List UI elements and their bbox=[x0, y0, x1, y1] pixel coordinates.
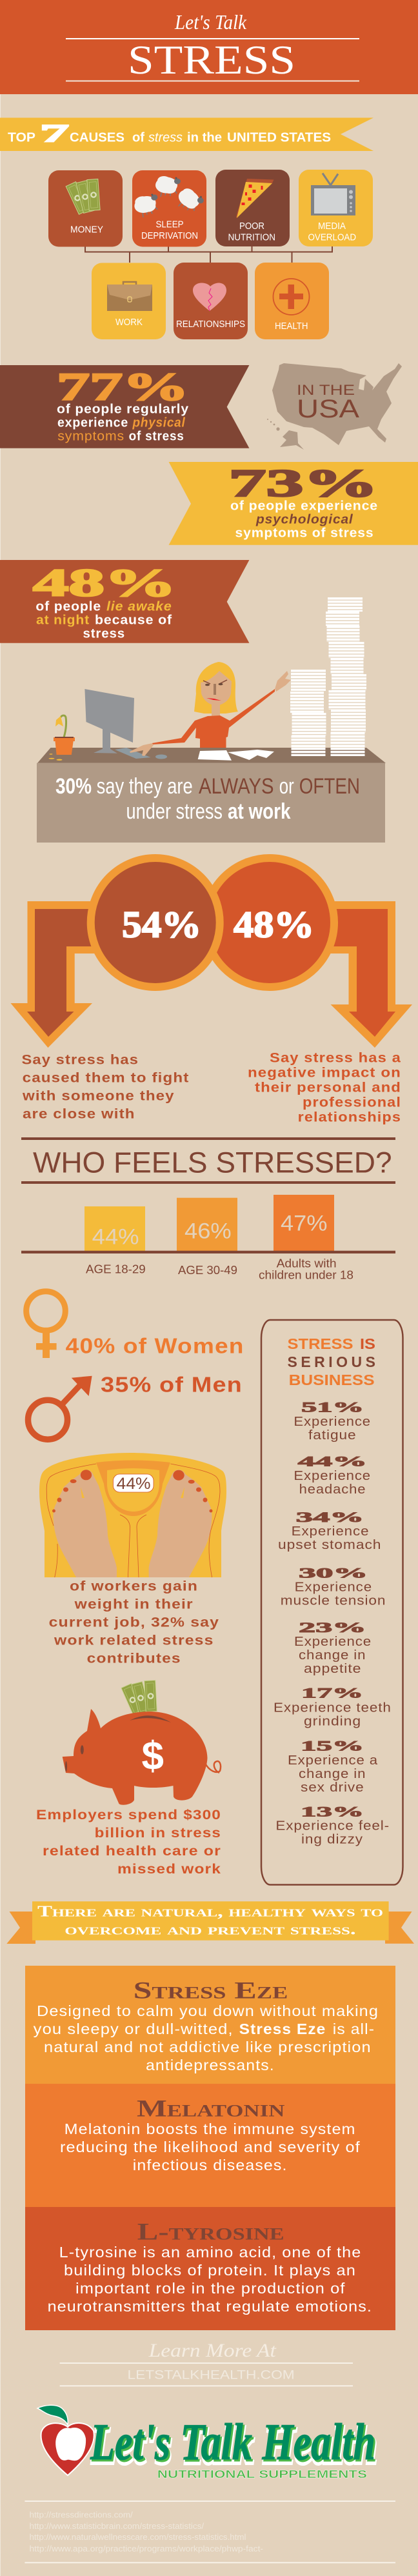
ribbon: 73% psychological symptoms: symptoms of stress bbox=[235, 526, 374, 541]
bar: age 18-29: 44% bbox=[92, 1224, 139, 1249]
ribbon: 48% lie awake: because of bbox=[95, 614, 172, 628]
stat: appetite: 23% bbox=[299, 1619, 366, 1635]
keyboard and mouse bbox=[115, 748, 167, 759]
text: workers gain weight: current job, 32% say bbox=[49, 1614, 219, 1630]
ribbon: 48% lie awake: lie awake bbox=[106, 600, 172, 614]
text: employers spend bbox=[36, 1807, 221, 1877]
stat: muscle tension: muscle tension bbox=[281, 1594, 386, 1608]
woman bbox=[130, 662, 291, 756]
stat: headache: 44% bbox=[298, 1453, 367, 1470]
banner: top 7 causes: of bbox=[132, 130, 144, 145]
stat: upset stomach: Experience bbox=[292, 1524, 369, 1539]
panel: Melatonin: Melatonin boosts the immune system bbox=[65, 2121, 356, 2137]
stat: sex drive: 15% bbox=[301, 1738, 364, 1754]
stat: dizzy: 13% bbox=[301, 1804, 364, 1820]
stat: fatigue: 51% bbox=[301, 1399, 364, 1415]
ribbon: 48% lie awake: 48% bbox=[33, 561, 176, 604]
bar: adults with children: children under 18 bbox=[259, 1268, 353, 1281]
stat: appetite: appetite bbox=[304, 1662, 361, 1676]
banner: natural healthy ways: overcome and prevent stress. bbox=[65, 1922, 356, 1939]
stat: fatigue: Experience bbox=[294, 1415, 371, 1429]
bar: adults with children: 47% bbox=[281, 1211, 328, 1235]
desk caption: under stress bbox=[126, 799, 223, 824]
panel: sleep deprivation: DEPRIVATION bbox=[141, 230, 198, 241]
left arrow bbox=[10, 901, 97, 1048]
stat: sex drive: change in bbox=[299, 1767, 366, 1781]
panel: sleep deprivation: SLEEP bbox=[156, 219, 183, 230]
stat: dizzy: ing dizzy bbox=[301, 1833, 363, 1847]
text: employers spend: missed work bbox=[117, 1861, 221, 1877]
bar: adults with children bbox=[259, 1195, 353, 1281]
panel: Stress Eze: is all- bbox=[333, 2021, 375, 2037]
ribbon: 48% lie awake: stress bbox=[83, 626, 125, 641]
panel: money bbox=[48, 170, 123, 246]
panel: health: HEALTH bbox=[275, 321, 308, 332]
loose papers bbox=[198, 750, 274, 761]
ribbon: 77% physical symptoms: of people regularly bbox=[57, 403, 189, 417]
stat: headache bbox=[294, 1453, 371, 1497]
script heading: Let's Talk: Let's Talk bbox=[174, 10, 247, 34]
panel: money: MONEY bbox=[70, 225, 103, 235]
ribbon: 77% physical symptoms bbox=[0, 365, 249, 448]
ribbon: 73% psychological symptoms: of people experience bbox=[230, 499, 378, 514]
stat: fatigue bbox=[294, 1399, 371, 1443]
banknotes bbox=[121, 1681, 157, 1716]
bar: adults with children: Adults with bbox=[277, 1257, 337, 1270]
banner: top 7 causes: TOP bbox=[8, 130, 35, 145]
bar chart bbox=[21, 1195, 395, 1281]
stat: dizzy: Experience feel- bbox=[275, 1819, 390, 1833]
call to action: learn more: Learn More At bbox=[148, 2340, 277, 2361]
ribbon: 73% psychological symptoms: psychological bbox=[255, 513, 353, 527]
desk caption: OFTEN bbox=[299, 774, 360, 799]
map: in the USA: USA bbox=[297, 395, 359, 423]
computer monitor bbox=[85, 689, 134, 754]
panel: Stress Eze bbox=[25, 1966, 395, 2084]
sources: http://stressdirections.com/ bbox=[30, 2510, 133, 2520]
logo: Let's Talk Health: NUTRITIONAL SUPPLEMENTS bbox=[157, 2468, 367, 2481]
stat: upset stomach: upset stomach bbox=[278, 1538, 381, 1552]
stat: women: 40% of Women bbox=[66, 1334, 244, 1358]
ribbon: 77% physical symptoms: of stress bbox=[129, 430, 184, 444]
repeat front stack feet over desk top bbox=[308, 748, 348, 756]
desk caption: 30% bbox=[55, 774, 92, 799]
ribbon: 73% psychological symptoms bbox=[169, 462, 418, 545]
circle: 48% bbox=[205, 858, 334, 987]
icon: banknotes bbox=[66, 179, 100, 214]
bar: age 30-49: AGE 30-49 bbox=[178, 1264, 237, 1277]
stat: muscle tension bbox=[281, 1565, 386, 1608]
ribbon: 77% physical symptoms: symptoms bbox=[57, 430, 124, 444]
icon: broken heart bbox=[193, 283, 226, 311]
text: employers spend: billion in stress bbox=[95, 1825, 221, 1841]
panel: media overload bbox=[299, 170, 373, 246]
sources bbox=[25, 2501, 395, 2563]
circle: 48%: 48% bbox=[234, 904, 314, 946]
logo: Let's Talk Health bbox=[37, 2405, 377, 2481]
banner: top 7 causes: 7 bbox=[40, 120, 69, 148]
text: 54% description: Say stress has bbox=[22, 1052, 139, 1067]
stat: teeth grinding bbox=[274, 1685, 392, 1728]
connector lines between causes bbox=[85, 246, 332, 263]
stat: sex drive: sex drive bbox=[301, 1781, 364, 1795]
banner: natural healthy ways: There are natural, healthy ways to bbox=[37, 1904, 383, 1921]
text: 48% description: relationships bbox=[298, 1110, 401, 1125]
text: employers spend: related health care or bbox=[43, 1843, 221, 1859]
panel: Melatonin: reducing the likelihood and severity of bbox=[60, 2139, 361, 2155]
sources: http://www.statisticbrain.com/stress-statistics/ bbox=[30, 2521, 204, 2531]
desk caption: say they are bbox=[97, 774, 193, 799]
ribbon: 48% lie awake bbox=[0, 560, 249, 643]
icon: briefcase bbox=[107, 282, 152, 311]
bar: age 30-49: 46% bbox=[184, 1219, 232, 1243]
text: 48% description: negative impact on bbox=[248, 1065, 401, 1081]
title: STRESS: STRESS bbox=[128, 37, 295, 83]
panel: L-tyrosine bbox=[25, 2207, 395, 2330]
panel: work bbox=[92, 263, 166, 339]
icon: apple bbox=[37, 2405, 94, 2475]
desk caption bbox=[55, 774, 360, 824]
banner: top 7 causes bbox=[0, 117, 373, 151]
text: 54% description: caused them to fight bbox=[23, 1070, 189, 1086]
map: in the USA bbox=[267, 363, 402, 450]
circle: 54%: 54% bbox=[122, 904, 201, 946]
banner: top 7 causes: stress bbox=[148, 130, 183, 145]
icon: bathroom scale with feet: 44% bbox=[117, 1475, 151, 1493]
bar: age 30-49 bbox=[177, 1198, 237, 1277]
panel: poor nutrition: POOR bbox=[239, 221, 264, 232]
map: in the USA: IN THE bbox=[297, 382, 355, 398]
text: 48% description: Say stress has a bbox=[270, 1050, 401, 1066]
heading: who feels stressed bbox=[21, 1137, 395, 1184]
icon: male symbol bbox=[28, 1376, 92, 1439]
stat: headache: Experience bbox=[294, 1469, 371, 1483]
text: workers gain weight: work related stress bbox=[54, 1632, 214, 1648]
banner: top 7 causes: CAUSES bbox=[70, 130, 124, 145]
desk caption: or bbox=[279, 774, 294, 799]
panel: Stress Eze: antidepressants. bbox=[146, 2057, 275, 2073]
call to action: learn more bbox=[60, 2340, 353, 2386]
panel: Stress Eze: you sleepy or dull-witted, bbox=[34, 2021, 234, 2037]
panel heading: STRESS bbox=[288, 1335, 353, 1352]
stat: muscle tension: 30% bbox=[299, 1565, 368, 1581]
text: 48% description: professional bbox=[303, 1095, 401, 1110]
circle: 54% bbox=[91, 858, 220, 987]
text: 48% description: their personal and bbox=[255, 1080, 401, 1095]
text: 54% description: with someone they bbox=[22, 1088, 175, 1104]
stat: appetite bbox=[294, 1619, 372, 1676]
panel: relationships: RELATIONSHIPS bbox=[176, 319, 245, 330]
stat: appetite: change in bbox=[299, 1648, 366, 1662]
header panel bbox=[0, 0, 418, 94]
stat: sex drive bbox=[288, 1738, 378, 1795]
icon: piggy bank: $ bbox=[142, 1734, 164, 1779]
panel: poor nutrition: NUTRITION bbox=[228, 232, 275, 243]
text: workers gain weight: contributes bbox=[87, 1650, 181, 1666]
panel: health bbox=[255, 263, 329, 339]
desk caption: ALWAYS bbox=[199, 774, 274, 799]
right arrow bbox=[323, 901, 412, 1048]
stat: muscle tension: Experience bbox=[295, 1581, 372, 1595]
panel: L-tyrosine: important role in the production of bbox=[75, 2280, 346, 2297]
ribbon: 77% physical symptoms: physical bbox=[132, 416, 186, 430]
ribbon: 77% physical symptoms: experience bbox=[57, 416, 128, 430]
bar: age 18-29 bbox=[85, 1206, 146, 1275]
text: workers gain weight: weight in their bbox=[74, 1596, 194, 1612]
stat: upset stomach: 34% bbox=[296, 1509, 364, 1525]
panel: Stress Eze: Stress Eze bbox=[134, 1978, 288, 2004]
panel: Stress Eze: Stress Eze bbox=[239, 2021, 326, 2037]
panel: Melatonin: infectious diseases. bbox=[133, 2157, 288, 2173]
icon: pizza slice bbox=[236, 179, 274, 218]
heading: who feels stressed: WHO FEELS STRESSED? bbox=[33, 1146, 392, 1179]
stat: fatigue: fatigue bbox=[308, 1428, 357, 1443]
banner: top 7 causes: in the bbox=[187, 130, 222, 145]
panel: relationships bbox=[174, 263, 248, 339]
sources: http://www.apa.org/practice/programs/workplace/phwp-fact- bbox=[30, 2544, 263, 2553]
paper stacks bbox=[307, 597, 349, 756]
bar: age 18-29: AGE 18-29 bbox=[86, 1263, 146, 1275]
panel: Melatonin bbox=[25, 2084, 395, 2207]
panel: L-tyrosine: neurotransmitters that regulate emotions. bbox=[48, 2298, 372, 2315]
panel: Melatonin: Melatonin bbox=[137, 2096, 285, 2122]
desk caption: at work bbox=[228, 799, 291, 824]
icon: sheep bbox=[132, 176, 206, 219]
panel: work: WORK bbox=[115, 317, 143, 328]
panel: stress is serious business bbox=[261, 1320, 403, 1885]
panel: poor nutrition bbox=[215, 170, 290, 246]
panel heading: SERIOUS bbox=[288, 1353, 375, 1370]
panel: Stress Eze: natural and not addictive like prescription bbox=[44, 2039, 372, 2055]
desk bbox=[37, 748, 386, 763]
stat: teeth grinding: grinding bbox=[304, 1714, 361, 1728]
ribbon: 73% psychological symptoms: 73% bbox=[229, 462, 378, 504]
stat: headache: headache bbox=[299, 1483, 366, 1497]
text: 54% description bbox=[22, 1052, 189, 1122]
stat: teeth grinding: Experience teeth bbox=[274, 1701, 392, 1715]
stat: upset stomach bbox=[278, 1509, 381, 1552]
panel heading bbox=[288, 1335, 375, 1388]
icon: medical cross bbox=[274, 279, 310, 315]
stat: appetite: Experience bbox=[294, 1635, 372, 1649]
stat: dizzy bbox=[275, 1804, 390, 1847]
icon: television bbox=[311, 173, 355, 215]
text: workers gain weight: of workers gain bbox=[70, 1578, 198, 1593]
panel: Stress Eze: Designed to calm you down without making bbox=[37, 2002, 379, 2019]
call to action: learn more: LETSTALKHEALTH.COM bbox=[128, 2369, 295, 2382]
ribbon: 77% physical symptoms: 77% bbox=[57, 365, 189, 408]
stat: men: 35% of Men bbox=[101, 1372, 243, 1396]
icon: bathroom scale with feet bbox=[39, 1453, 226, 1577]
stat: sex drive: Experience a bbox=[288, 1753, 378, 1768]
icon: female symbol bbox=[26, 1292, 65, 1358]
text: employers spend: Employers spend $300 bbox=[36, 1807, 221, 1822]
text: workers gain weight bbox=[49, 1578, 219, 1666]
panel: media overload: MEDIA bbox=[318, 221, 346, 232]
banner: top 7 causes: UNITED STATES bbox=[227, 130, 331, 145]
text: 54% description: are close with bbox=[23, 1106, 135, 1122]
sources: http://www.naturalwellnesscare.com/stress-statistics.html bbox=[30, 2532, 246, 2542]
panel: L-tyrosine: building blocks of protein. It plays an bbox=[64, 2262, 356, 2279]
text: 48% description bbox=[248, 1050, 401, 1125]
panel: L-tyrosine: L-tyrosine is an amino acid, one of the bbox=[59, 2244, 361, 2261]
icon: piggy bank bbox=[63, 1681, 221, 1805]
panel: sleep deprivation bbox=[132, 170, 206, 246]
illustration: stressed worker at desk bbox=[37, 597, 386, 843]
panel: media overload: OVERLOAD bbox=[308, 232, 356, 243]
ribbon: 48% lie awake: at night bbox=[36, 614, 90, 628]
banner: natural healthy ways bbox=[6, 1901, 414, 1944]
panel heading: BUSINESS bbox=[289, 1372, 375, 1388]
stat: teeth grinding: 17% bbox=[301, 1685, 363, 1701]
panel heading: IS bbox=[360, 1335, 375, 1352]
wilted plant bbox=[49, 715, 75, 761]
panel: L-tyrosine: L-tyrosine bbox=[137, 2219, 284, 2245]
ribbon: 48% lie awake: of people bbox=[35, 600, 101, 614]
